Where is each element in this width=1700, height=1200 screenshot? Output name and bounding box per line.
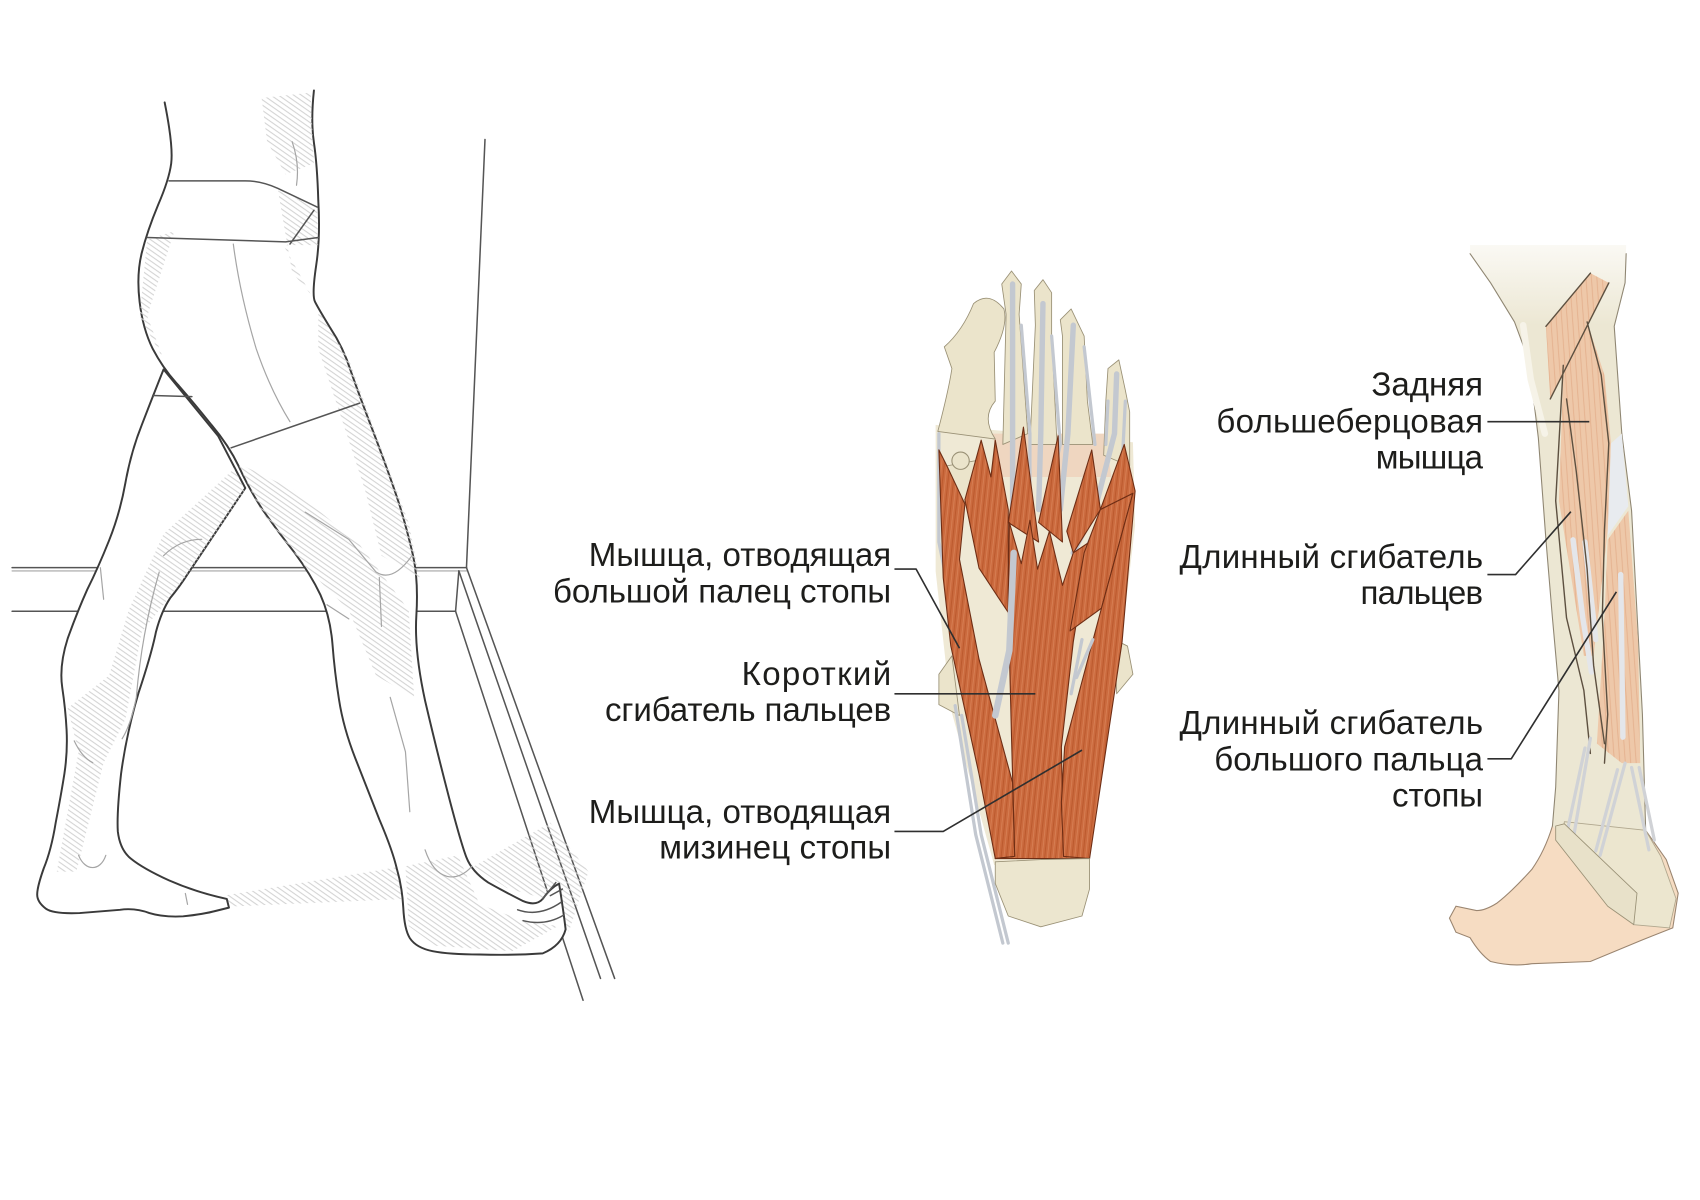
muscle: abductor hallucis: [939, 450, 1015, 859]
distal tendons: [1567, 738, 1654, 855]
side bone bumps: [939, 640, 1133, 715]
label: flexor digitorum brevis: [605, 656, 891, 729]
muscle: quadratus lateral belly: [1070, 493, 1133, 631]
knee tendon highlight: [1523, 325, 1545, 434]
back leg muscle detail: [74, 539, 202, 904]
muscle: flexor digitorum brevis: [995, 520, 1090, 859]
label: abductor digiti minimi: [589, 794, 891, 867]
foot backing: [936, 425, 1135, 865]
front leg muscle detail: [305, 512, 472, 877]
front toes: [518, 883, 563, 923]
shorts seams: [147, 181, 360, 448]
retinaculum band: [1556, 824, 1637, 925]
label: flexor digitorum longus: пальцев: [1361, 575, 1483, 612]
gray tendons at the midfoot: [995, 553, 1014, 715]
muscle: flexor hallucis longus: [1597, 511, 1640, 763]
muscle: abductor digiti minimi: [1061, 444, 1135, 859]
pale forefoot strip: [992, 434, 1111, 477]
label: tibialis posterior: большеберцовая: [1216, 404, 1483, 441]
label: abductor digiti minimi: мизинец стопы: [659, 830, 891, 867]
heel bone: [995, 859, 1090, 927]
front leg shading: [262, 93, 314, 174]
illustration: plantar foot muscles: [936, 271, 1135, 943]
label: flexor hallucis longus: стопы: [1392, 778, 1483, 815]
white tendon strip: [1608, 434, 1628, 536]
illustration: posterior lower leg: [1449, 245, 1678, 965]
muscle: lumbricals: [1008, 427, 1100, 553]
muscle: flexor hallucis brevis: [965, 440, 1008, 612]
label: flexor digitorum brevis: Короткий: [742, 656, 891, 693]
label: flexor digitorum longus: Длинный сгибатель: [1180, 539, 1483, 576]
label: flexor hallucis longus: Длинный сгибатель: [1180, 705, 1483, 742]
callout lines: [894, 422, 1616, 831]
ankle bones and heel: [1561, 822, 1676, 928]
back leg: [37, 369, 245, 917]
label: tibialis posterior: [1216, 367, 1484, 476]
floor shading: [223, 866, 405, 907]
foot skin: [1449, 826, 1678, 965]
label: abductor hallucis: [553, 537, 891, 611]
label: flexor digitorum longus: [1180, 539, 1483, 612]
label: flexor hallucis longus: большого пальца: [1214, 742, 1484, 779]
toes: [938, 271, 1130, 575]
label: tibialis posterior: мышца: [1376, 439, 1484, 476]
muscle: popliteus: [1546, 273, 1609, 399]
label: tibialis posterior: Задняя: [1371, 367, 1483, 404]
muscle outline details: [1546, 273, 1609, 763]
leg tissue: [1470, 245, 1646, 846]
label: abductor hallucis: Мышца, отводящая: [589, 537, 891, 574]
torso and front leg: [138, 90, 566, 955]
white tendon streaks: [1573, 540, 1623, 737]
label: abductor digiti minimi: Мышца, отводящая: [589, 794, 891, 831]
label: flexor hallucis longus: [1180, 705, 1484, 815]
muscle: tibialis posterior and flexor digitorum: [1559, 322, 1611, 656]
label: abductor hallucis: большой палец стопы: [553, 574, 891, 611]
midfoot bones: [945, 461, 976, 509]
illustration: standing calf stretch at the wall: [12, 90, 615, 1000]
wall and baseboard lines: [12, 139, 615, 1000]
label: flexor digitorum brevis: сгибатель пальцев: [605, 692, 891, 729]
leg outline: [1470, 254, 1646, 830]
back leg shading: [57, 469, 245, 872]
